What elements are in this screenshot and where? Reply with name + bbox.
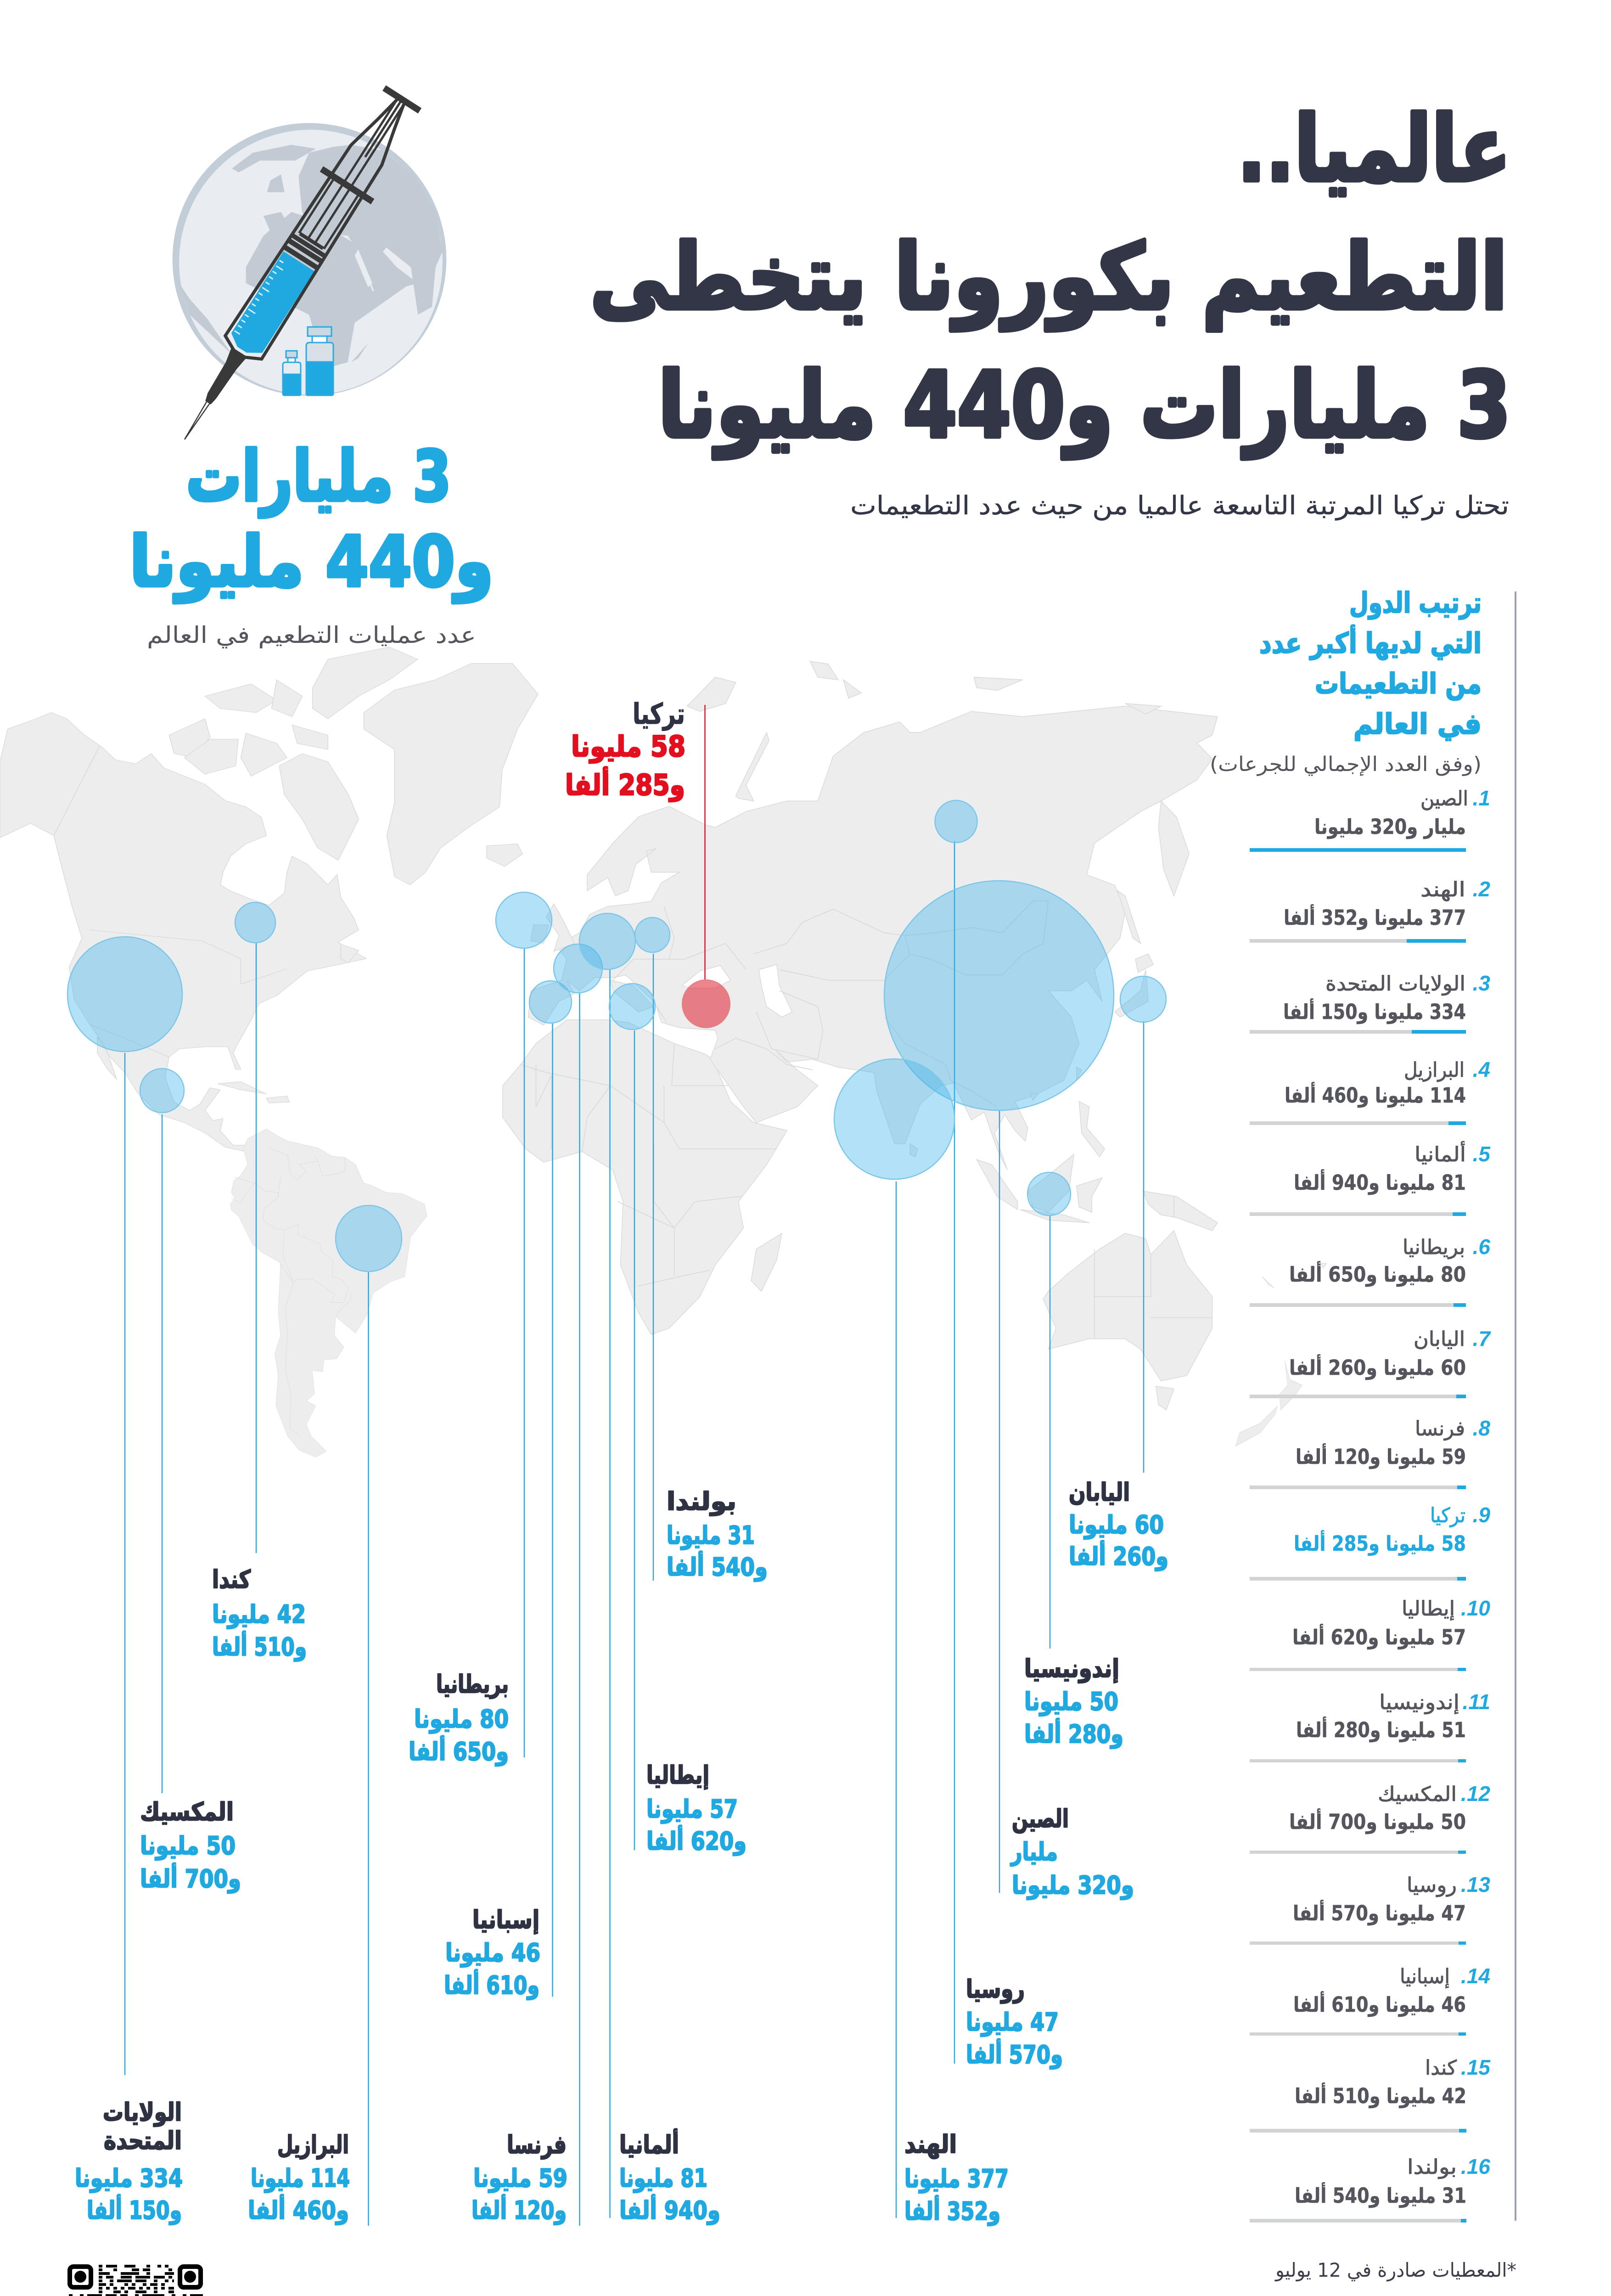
label: Germany: و940 ألفا xyxy=(619,2194,720,2225)
rank 1: مليار و320 مليونا xyxy=(1314,815,1466,839)
label: Spain: 46 مليونا xyxy=(445,1938,540,1967)
headline figure: و440 مليونا xyxy=(129,521,494,603)
icon: syringe xyxy=(159,80,429,456)
label: United States: الولايات xyxy=(103,2098,182,2127)
large vial xyxy=(306,327,333,395)
rank 16: .16 xyxy=(1461,2155,1490,2178)
label: United States: 334 مليونا xyxy=(75,2164,183,2193)
ranking heading: ترتيب الدول xyxy=(1349,586,1482,619)
rank 4 xyxy=(1250,1058,1490,1125)
rank 14 xyxy=(1250,1964,1490,2036)
label: India xyxy=(904,2130,1009,2226)
rank 4: البرازيل xyxy=(1404,1058,1465,1082)
rank 15 xyxy=(1250,2055,1491,2133)
plunger rods xyxy=(299,93,414,249)
label: India: الهند xyxy=(904,2130,957,2159)
rank 15: 42 مليونا و510 ألفا xyxy=(1295,2082,1466,2108)
panel: ranking xyxy=(1210,586,1516,2223)
rank 5: ألمانيا xyxy=(1415,1141,1466,1166)
label: Britain: و650 ألفا xyxy=(409,1735,509,1766)
rank 6: بريطانيا xyxy=(1403,1236,1465,1259)
ranking heading xyxy=(1259,586,1482,741)
label: France: 59 مليونا xyxy=(473,2164,567,2193)
label: Spain: إسبانيا xyxy=(472,1905,539,1934)
label: Germany: 81 مليونا xyxy=(619,2164,707,2193)
rank 12: المكسيك xyxy=(1378,1783,1457,1806)
label: Poland: بولندا xyxy=(667,1487,736,1516)
rank 2: 377 مليونا و352 ألفا xyxy=(1284,904,1466,930)
rank 8: فرنسا xyxy=(1415,1417,1465,1441)
label: Germany: ألمانيا xyxy=(619,2128,679,2159)
headline figure xyxy=(129,436,494,603)
rank 5: 81 مليونا و940 ألفا xyxy=(1294,1169,1466,1195)
rank 8: .8 xyxy=(1473,1416,1490,1440)
rank 16 xyxy=(1250,2155,1490,2223)
icon: vials xyxy=(283,327,333,395)
rank 14: 46 مليونا و610 ألفا xyxy=(1293,1991,1466,2017)
label: Mexico: المكسيك xyxy=(140,1797,234,1826)
label: Japan: و260 ألفا xyxy=(1069,1540,1168,1571)
label: Japan xyxy=(1069,1478,1168,1571)
label: Russia: روسيا xyxy=(966,1975,1025,2003)
tick marks xyxy=(235,260,286,335)
rank 10: 57 مليونا و620 ألفا xyxy=(1292,1624,1466,1649)
rank 7: .7 xyxy=(1473,1327,1491,1351)
rank 4: .4 xyxy=(1473,1058,1490,1081)
rank 9: Turkey highlighted: 58 مليونا و285 ألفا xyxy=(1294,1530,1466,1556)
headline figure: 3 مليارات xyxy=(186,436,451,518)
label: Turkey: تركيا xyxy=(633,697,685,731)
label: Mexico: 50 مليونا xyxy=(140,1831,236,1860)
headline caption: عدد عمليات التطعيم في العالم xyxy=(147,622,476,648)
bubbles xyxy=(67,800,1166,1272)
label: Russia: 47 مليونا xyxy=(966,2008,1059,2037)
rank 3: 334 مليونا و150 ألفا xyxy=(1283,998,1466,1024)
rank 8: 59 مليونا و120 ألفا xyxy=(1296,1443,1466,1469)
rank 16: 31 مليونا و540 ألفا xyxy=(1295,2182,1466,2208)
rank 1: الصين xyxy=(1420,787,1468,810)
label: Russia xyxy=(966,1975,1063,2069)
label: China: مليار xyxy=(1010,1837,1058,1866)
label: Spain: و610 ألفا xyxy=(444,1969,539,2000)
label: India: 377 مليونا xyxy=(904,2164,1009,2193)
label: Russia: و570 ألفا xyxy=(966,2038,1063,2069)
rank 5 xyxy=(1250,1141,1491,1216)
label: United States: و150 ألفا xyxy=(87,2194,182,2225)
label: Italy: و620 ألفا xyxy=(646,1825,747,1856)
flange xyxy=(320,166,374,204)
rank 13: روسيا xyxy=(1407,1874,1457,1897)
label: Turkey xyxy=(565,697,685,802)
rank 2: الهند xyxy=(1420,878,1465,901)
leader line: Turkey xyxy=(704,705,706,980)
label: Indonesia: 50 مليونا xyxy=(1024,1687,1118,1716)
label: Poland xyxy=(667,1487,768,1581)
label: Britain: 80 مليونا xyxy=(414,1705,509,1733)
rank 11 xyxy=(1250,1690,1490,1762)
rank 10 xyxy=(1250,1596,1490,1671)
vertical rule xyxy=(1515,591,1516,2221)
label: United States xyxy=(75,2098,183,2225)
label: Britain: بريطانيا xyxy=(436,1670,509,1699)
rank 3: .3 xyxy=(1473,971,1490,995)
rank 15: .15 xyxy=(1461,2055,1491,2079)
rank 13: .13 xyxy=(1461,1873,1490,1896)
label: Turkey: 58 مليونا xyxy=(571,730,685,763)
title xyxy=(590,96,1511,459)
label: Italy: إيطاليا xyxy=(646,1761,709,1790)
leader lines xyxy=(125,841,1144,2226)
rank 10: إيطاليا xyxy=(1402,1597,1455,1621)
label: Canada xyxy=(212,1565,307,1661)
label: Japan: 60 مليونا xyxy=(1069,1510,1164,1539)
label: Mexico xyxy=(140,1797,241,1893)
ranking heading: في العالم xyxy=(1353,707,1482,741)
rank 7: اليابان xyxy=(1414,1328,1465,1351)
label: Canada: 42 مليونا xyxy=(212,1600,306,1629)
rank 9: Turkey highlighted xyxy=(1250,1503,1490,1581)
label: Italy xyxy=(646,1761,747,1856)
piston xyxy=(283,229,329,270)
rank 9: Turkey highlighted: .9 xyxy=(1473,1503,1490,1527)
hub xyxy=(200,347,247,407)
world map xyxy=(0,647,1327,1457)
rank 5: .5 xyxy=(1473,1142,1491,1166)
title: عالميا.. xyxy=(1237,96,1511,202)
label: United States: المتحدة xyxy=(104,2126,182,2155)
bubble: Turkey xyxy=(682,980,730,1028)
rank 14: إسبانيا xyxy=(1400,1965,1450,1988)
rank 3 xyxy=(1250,971,1490,1034)
title: 3 مليارات و440 مليونا xyxy=(658,352,1511,459)
small vial xyxy=(283,351,301,395)
label: Indonesia: و280 ألفا xyxy=(1024,1718,1123,1749)
rank 9: Turkey highlighted: تركيا xyxy=(1430,1504,1465,1527)
rank 14: .14 xyxy=(1461,1964,1490,1988)
label: Brazil xyxy=(248,2130,350,2225)
label: Japan: اليابان xyxy=(1069,1478,1130,1507)
rank 12 xyxy=(1250,1782,1490,1854)
rank 12: 50 مليونا و700 ألفا xyxy=(1289,1808,1466,1834)
label: Mexico: و700 ألفا xyxy=(140,1863,241,1893)
rank 11: إندونيسيا xyxy=(1379,1691,1459,1714)
rank 6: .6 xyxy=(1473,1235,1490,1259)
rank 15: كندا xyxy=(1425,2056,1457,2080)
rank 6: 80 مليونا و650 ألفا xyxy=(1289,1261,1466,1287)
rank 16: بولندا xyxy=(1407,2155,1457,2179)
label: Britain xyxy=(409,1670,509,1766)
label: Germany xyxy=(619,2128,720,2225)
label: Brazil: البرازيل xyxy=(277,2130,349,2159)
rank 1 xyxy=(1250,786,1490,852)
rank 2 xyxy=(1250,877,1490,943)
label: China: الصين xyxy=(1012,1804,1069,1833)
label: Turkey: و285 ألفا xyxy=(565,766,685,802)
ranking note: (وفق العدد الإجمالي للجرعات) xyxy=(1210,753,1482,776)
footnote: *المعطيات صادرة في 12 يوليو xyxy=(1274,2259,1516,2282)
liquid xyxy=(227,252,314,360)
rank 7 xyxy=(1250,1327,1491,1398)
label: France: و120 ألفا xyxy=(472,2194,567,2225)
rank 1: .1 xyxy=(1473,786,1490,810)
label: France xyxy=(472,2130,567,2225)
rank 11: .11 xyxy=(1462,1690,1490,1714)
QR code xyxy=(69,2266,203,2296)
ranking heading: التي لديها أكبر عدد xyxy=(1259,625,1482,660)
rank 2: .2 xyxy=(1473,877,1490,901)
finder patterns xyxy=(70,2267,201,2296)
label: Canada: و510 ألفا xyxy=(212,1631,307,1661)
rank 7: 60 مليونا و260 ألفا xyxy=(1289,1354,1466,1380)
subtitle: تحتل تركيا المرتبة التاسعة عالميا من حيث عدد التطعيمات xyxy=(850,491,1509,521)
rank 12: .12 xyxy=(1461,1782,1490,1806)
barrel xyxy=(221,90,418,365)
needle xyxy=(183,400,211,440)
label: Poland: و540 ألفا xyxy=(667,1551,768,1581)
label: Indonesia xyxy=(1024,1654,1123,1749)
title: التطعيم بكورونا يتخطى xyxy=(590,224,1508,331)
rank 6 xyxy=(1250,1235,1490,1307)
rank 13 xyxy=(1250,1873,1490,1945)
label: China xyxy=(1010,1804,1134,1900)
label: Poland: 31 مليونا xyxy=(667,1521,755,1550)
rank 10: .10 xyxy=(1461,1596,1490,1620)
label: Canada: كندا xyxy=(212,1565,251,1594)
label: Indonesia: إندونيسيا xyxy=(1024,1654,1119,1683)
label: France: فرنسا xyxy=(507,2130,567,2159)
rank 13: 47 مليونا و570 ألفا xyxy=(1293,1900,1466,1925)
rank 3: الولايات المتحدة xyxy=(1325,972,1465,996)
label: India: و352 ألفا xyxy=(904,2195,1000,2226)
label: Brazil: و460 ألفا xyxy=(248,2194,349,2225)
ranking heading: من التطعيمات xyxy=(1315,667,1482,700)
label: China: و320 مليونا xyxy=(1012,1871,1134,1900)
rank 4: 114 مليونا و460 ألفا xyxy=(1285,1082,1466,1108)
label: Spain xyxy=(444,1905,540,2000)
top handle xyxy=(382,85,421,113)
label: Italy: 57 مليونا xyxy=(646,1795,738,1823)
rank 8 xyxy=(1250,1416,1490,1489)
globe xyxy=(173,123,446,396)
label: Brazil: 114 مليونا xyxy=(251,2164,350,2193)
rank 11: 51 مليونا و280 ألفا xyxy=(1296,1716,1466,1742)
